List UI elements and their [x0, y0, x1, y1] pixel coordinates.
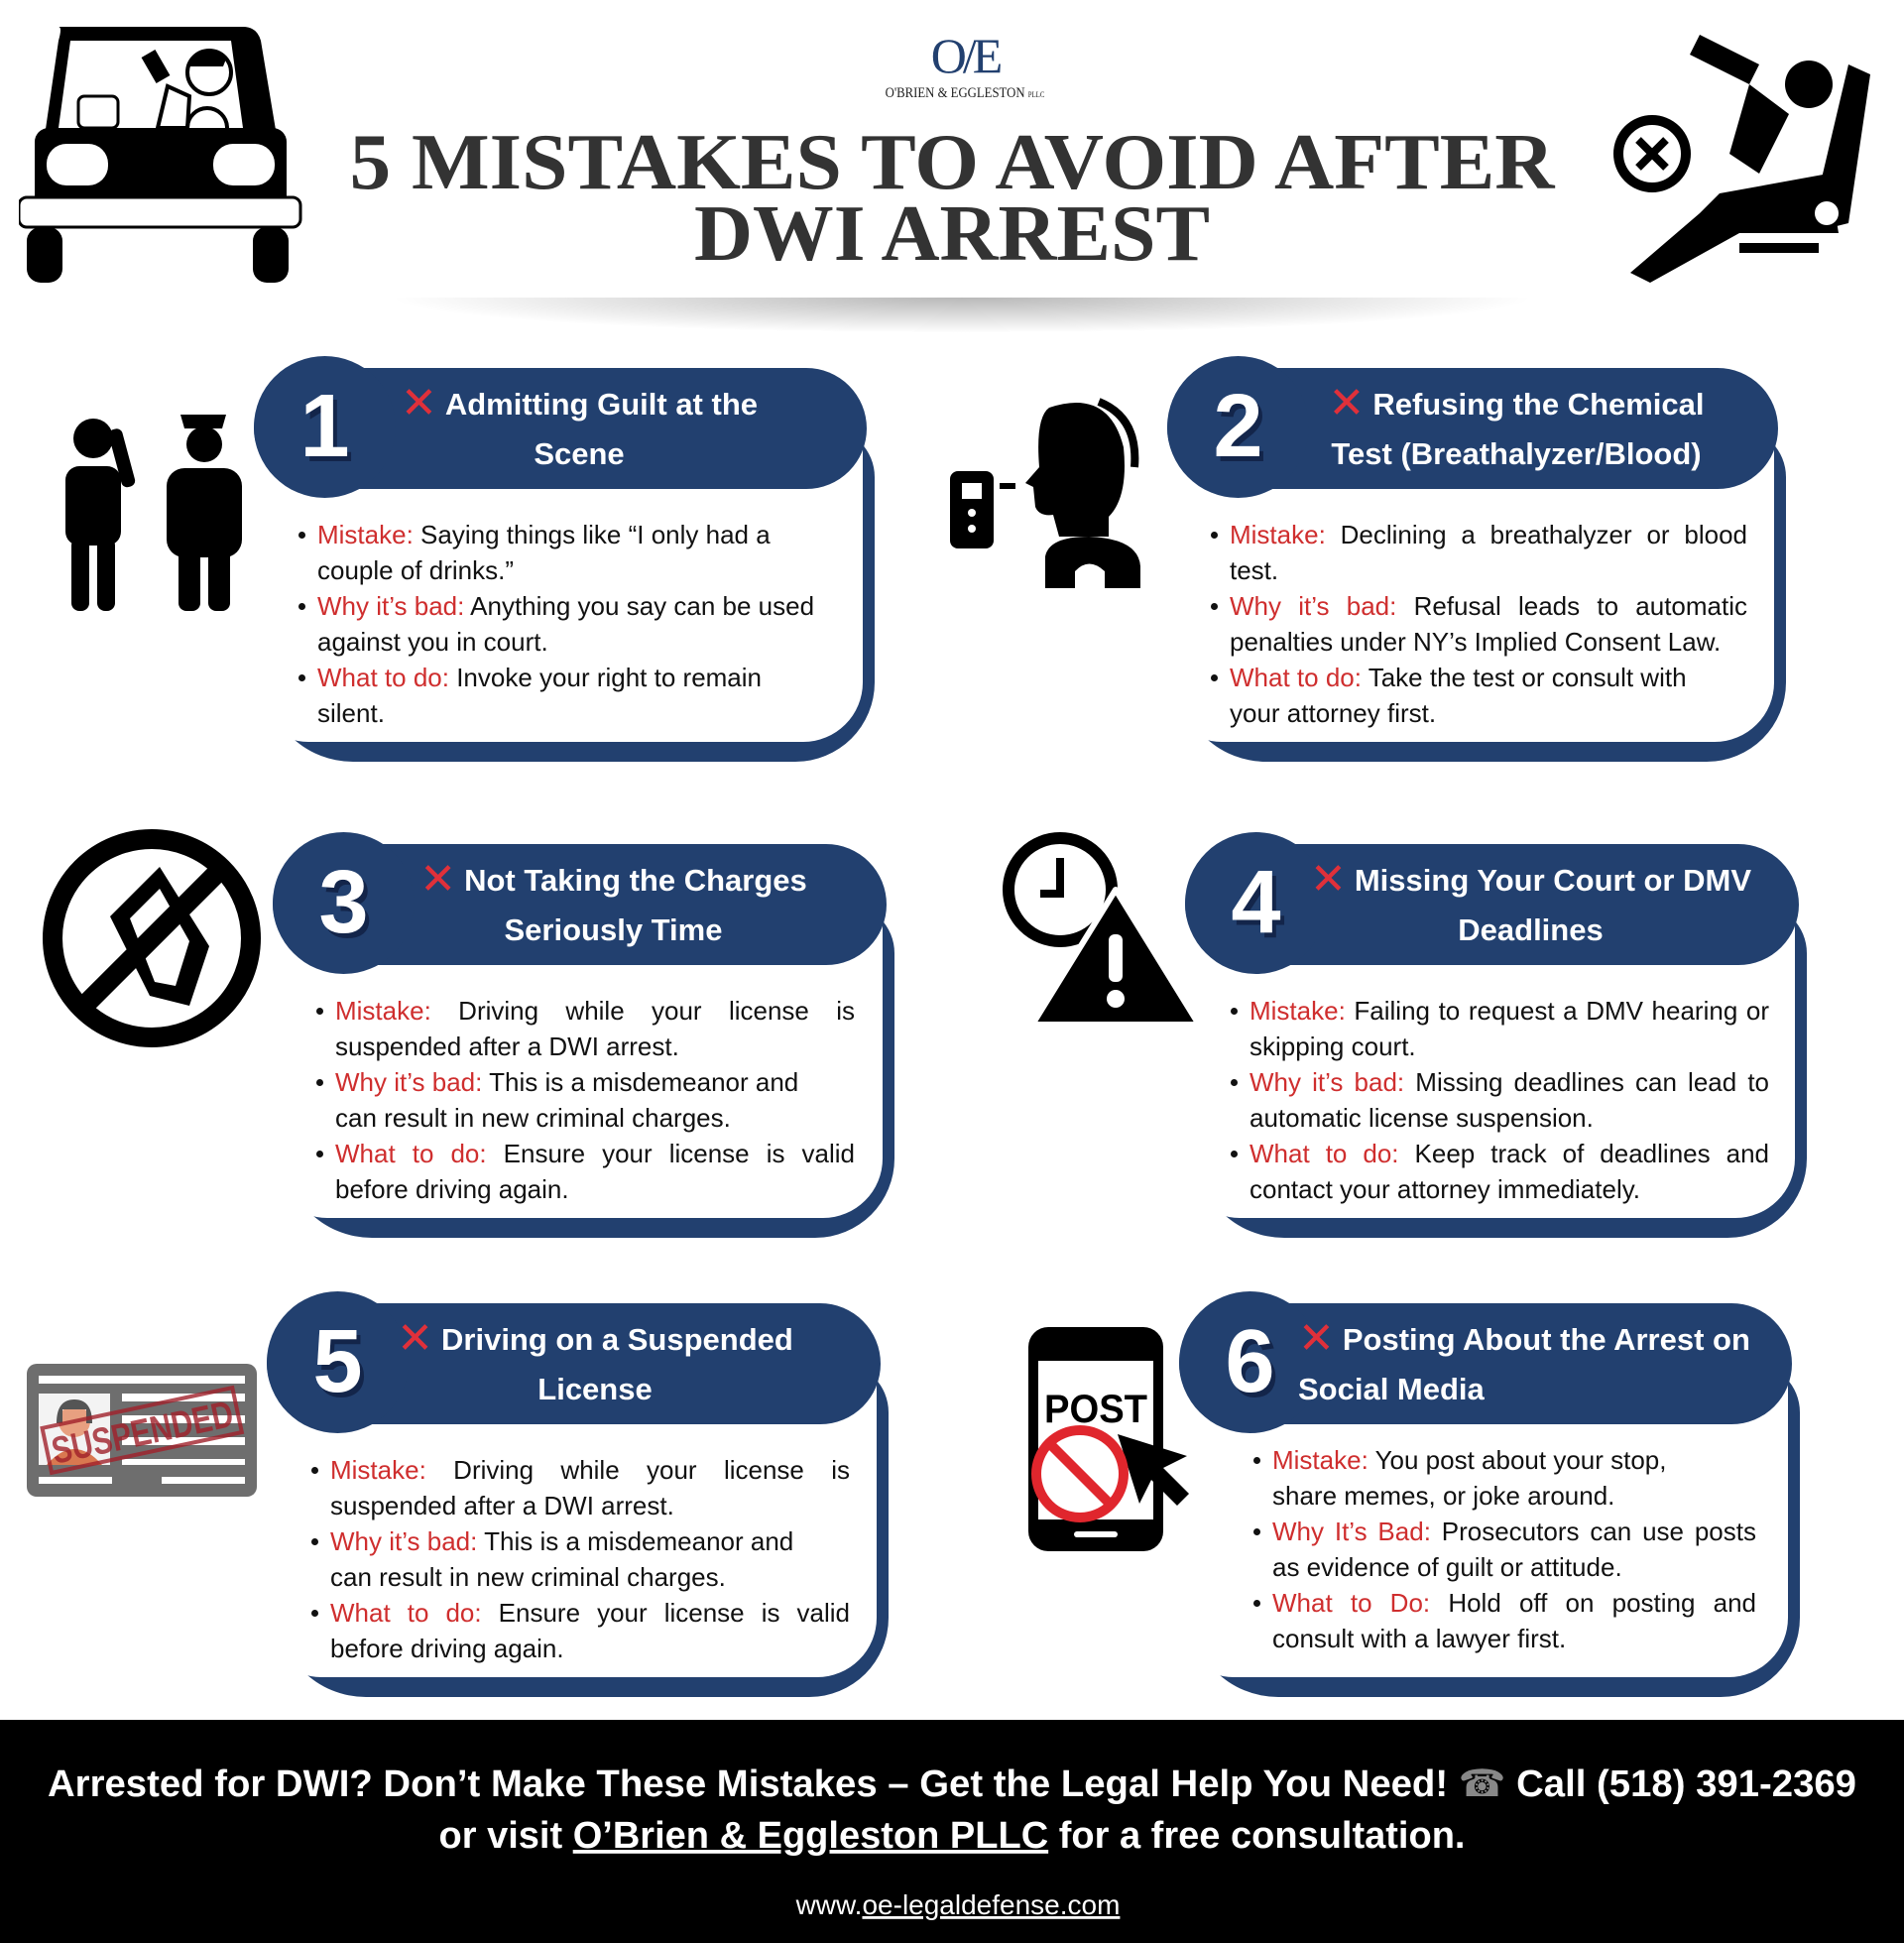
text 1: Mistake: Saying things like “I only had a couple of drinks.” [317, 520, 771, 585]
heading 5: ✕ Driving on a Suspended [397, 1313, 793, 1363]
text 6: share memes, or joke around. [1272, 1481, 1614, 1511]
text 6 [1253, 1445, 1756, 1653]
logo: O'BRIEN & EGGLESTON PLLC [886, 85, 1044, 101]
number 3: 3 [318, 853, 369, 952]
icon: suspended license [27, 1364, 257, 1497]
card 3 [273, 832, 894, 1238]
heading 5 [397, 1313, 793, 1406]
text 3: Why it’s bad: This is a misdemeanor and [335, 1067, 798, 1097]
heading 2: ✕ Refusing the Chemical [1328, 379, 1705, 426]
footer call to action: Arrested for DWI? Don’t Make These Mistakes – Get the Legal Help You Need! ☎ Call (518) 391-2369 [48, 1763, 1856, 1805]
logo [886, 28, 1045, 101]
text 2: your attorney first. [1230, 698, 1436, 728]
heading 3: ✕ Not Taking the Charges [419, 855, 807, 903]
heading 2 [1328, 379, 1705, 470]
card 1 [254, 356, 875, 762]
icon: no paper sign [43, 829, 261, 1047]
number 5: 5 [312, 1312, 363, 1411]
heading 3: Seriously Time [504, 912, 722, 946]
text 5 [311, 1455, 850, 1663]
text 1: What to do: Invoke your right to remain silent. [317, 663, 762, 728]
text 4 [1231, 996, 1769, 1204]
text 5: Why it’s bad: This is a misdemeanor and [330, 1526, 793, 1556]
text 4: Why it’s bad: Missing deadlines can lead to automatic license suspension. [1250, 1067, 1769, 1133]
text 5: What to do: Ensure your license is valid before driving again. [330, 1598, 850, 1663]
number 6: 6 [1225, 1312, 1275, 1411]
heading 2: Test (Breathalyzer/Blood) [1331, 436, 1702, 470]
title [349, 119, 1556, 278]
text 5: Mistake: Driving while your license is suspended after a DWI arrest. [330, 1455, 850, 1520]
text 2 [1211, 520, 1747, 728]
heading 1 [401, 379, 758, 470]
icon: phone no post: POST [1044, 1388, 1147, 1431]
text 3: can result in new criminal charges. [335, 1103, 731, 1133]
footer [0, 1720, 1904, 1943]
text 2: What to do: Take the test or consult with [1230, 663, 1687, 692]
heading 5: License [537, 1371, 653, 1406]
icon: crash seat [1613, 35, 1870, 283]
icon: clock and warning [1003, 832, 1194, 1022]
card 6 [1179, 1291, 1800, 1697]
text 1: Why it’s bad: Anything you say can be used against you in court. [317, 591, 814, 657]
text 6: Why It’s Bad: Prosecutors can use posts as evidence of guilt or attitude. [1272, 1517, 1756, 1582]
heading 1: Scene [534, 436, 625, 470]
number 2: 2 [1213, 377, 1263, 476]
text 3 [316, 996, 855, 1204]
text 1 [298, 520, 814, 728]
heading 3 [419, 855, 807, 946]
text 3: Mistake: Driving while your license is suspended after a DWI arrest. [335, 996, 855, 1061]
number 4: 4 [1231, 853, 1281, 952]
heading 4: Deadlines [1458, 912, 1604, 946]
text 4: Mistake: Failing to request a DMV hearing or skipping court. [1250, 996, 1769, 1061]
text 6: What to Do: Hold off on posting and consult with a lawyer first. [1272, 1588, 1756, 1653]
heading 6 [1298, 1313, 1750, 1406]
heading 4 [1310, 855, 1751, 946]
text 6: Mistake: You post about your stop, [1272, 1445, 1666, 1475]
card 2 [1167, 356, 1786, 762]
icon: breathalyzer head [950, 398, 1140, 588]
footer call to action [48, 1763, 1856, 1920]
heading 1: ✕ Admitting Guilt at the [401, 379, 758, 426]
title: 5 MISTAKES TO AVOID AFTER [349, 119, 1556, 206]
text 2: Mistake: Declining a breathalyzer or blood test. [1230, 520, 1747, 585]
footer call to action: www.oe-legaldefense.com [795, 1889, 1120, 1920]
logo: O/E [931, 28, 999, 83]
text 3: What to do: Ensure your license is valid before driving again. [335, 1139, 855, 1204]
heading 4: ✕ Missing Your Court or DMV [1310, 855, 1751, 903]
title shadow [387, 298, 1537, 333]
footer call to action: or visit O’Brien & Eggleston PLLC for a free consultation. [438, 1815, 1466, 1857]
card 5 [267, 1291, 889, 1697]
text 2: Why it’s bad: Refusal leads to automatic penalties under NY’s Implied Consent Law. [1230, 591, 1747, 657]
card 4 [1185, 832, 1807, 1238]
heading 6: Social Media [1298, 1371, 1485, 1406]
icon: car with drinking driver [19, 27, 301, 283]
icon: phone no post [1028, 1327, 1189, 1551]
icon: officer and drinker [65, 415, 242, 611]
text 4: What to do: Keep track of deadlines and contact your attorney immediately. [1250, 1139, 1769, 1204]
heading 6: ✕ Posting About the Arrest on [1298, 1313, 1750, 1363]
number 1: 1 [299, 377, 350, 476]
text 5: can result in new criminal charges. [330, 1562, 726, 1592]
title: DWI ARREST [694, 190, 1210, 278]
